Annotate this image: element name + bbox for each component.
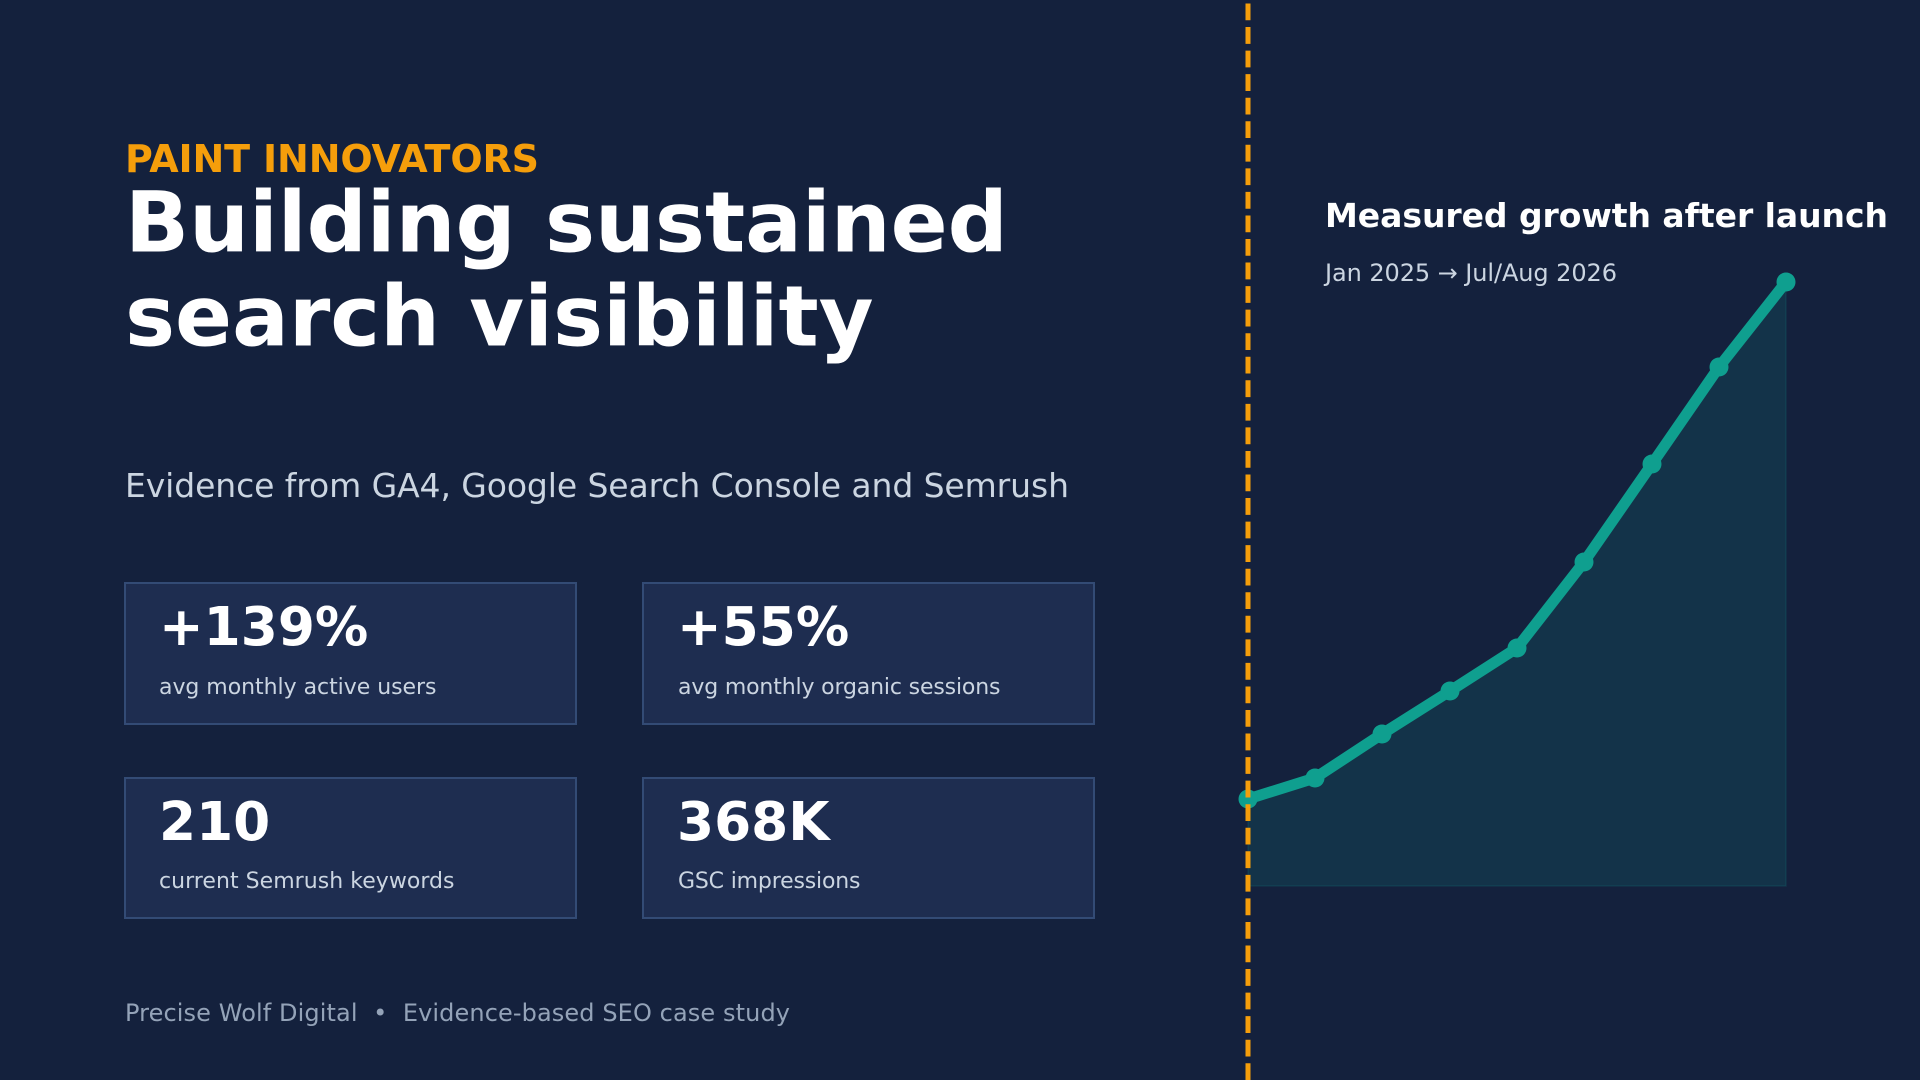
panel: organic sessions stat (643, 583, 1094, 724)
title: Building sustained (125, 174, 1008, 272)
panel: keywords stat (125, 778, 576, 918)
stat value: +139% (159, 596, 368, 658)
eyebrow: client name: PAINT INNOVATORS (125, 137, 539, 181)
launch marker: dashed line (1246, 0, 1250, 1080)
stat value: 368K (677, 791, 831, 853)
panel: active users stat (125, 583, 576, 724)
subtitle: Evidence from GA4, Google Search Console and Semrush (125, 466, 1069, 505)
stat value: 210 (159, 791, 270, 853)
chart subheading: Jan 2025 → Jul/Aug 2026 (1323, 259, 1617, 287)
stat label: GSC impressions (678, 869, 860, 894)
panel: impressions stat (643, 778, 1094, 918)
stat label: current Semrush keywords (159, 869, 454, 894)
chart heading: Measured growth after launch (1325, 196, 1888, 235)
title: search visibility (125, 268, 874, 366)
stat label: avg monthly organic sessions (678, 675, 1000, 700)
stat value: +55% (677, 596, 849, 658)
line chart: growth (1238, 272, 1796, 886)
stat label: avg monthly active users (159, 675, 436, 700)
footer: Precise Wolf Digital • Evidence-based SEO case study (125, 999, 790, 1027)
